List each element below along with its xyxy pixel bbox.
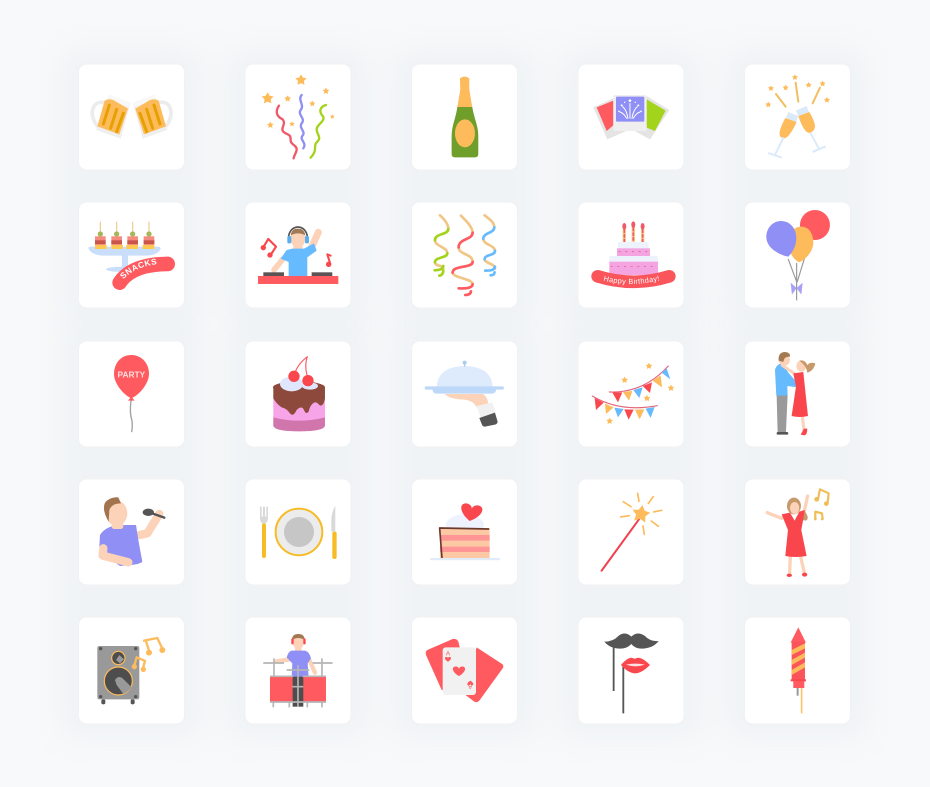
panel: dancing woman bbox=[744, 479, 850, 585]
icon: man playing drums bbox=[263, 634, 333, 707]
panel: champagne bottle bbox=[412, 64, 518, 170]
panel: balloons bbox=[744, 202, 850, 308]
panel: playing cards bbox=[412, 617, 518, 724]
panel: serving tray bbox=[412, 341, 518, 447]
panel: sparkler bbox=[578, 479, 684, 585]
icon: photos with fireworks bbox=[593, 95, 669, 139]
label: ace bottom: A bbox=[468, 683, 473, 690]
icon: slice of cake with heart bbox=[430, 503, 500, 560]
icon: stars and serpentine bbox=[262, 74, 335, 158]
icon: couple bbox=[775, 352, 815, 435]
icon: man singing bbox=[99, 497, 164, 566]
panel: dancing couple bbox=[744, 341, 850, 447]
icon: bottle bbox=[452, 76, 478, 157]
panel: beer mugs bbox=[78, 64, 184, 170]
panel: fireworks photos bbox=[578, 64, 684, 170]
icon: dancer and music notes bbox=[767, 489, 829, 577]
label: snacks: SNACKS bbox=[120, 258, 156, 278]
panel: firework rocket bbox=[744, 617, 850, 724]
label: happy birthday: Happy Birthday! bbox=[604, 276, 659, 286]
panel: party balloon bbox=[78, 341, 184, 447]
panel: drummer bbox=[245, 617, 351, 724]
panel: confetti bbox=[245, 64, 351, 170]
panel: photo booth props bbox=[578, 617, 684, 724]
panel: speaker bbox=[78, 617, 184, 724]
icon: hand holding cloche bbox=[425, 361, 504, 427]
panel: cake slice bbox=[412, 479, 518, 585]
icon: ace of hearts cards bbox=[426, 639, 503, 702]
panel: streamers bbox=[412, 202, 518, 308]
panel: singer bbox=[78, 479, 184, 585]
panel: birthday cake bbox=[578, 202, 684, 308]
icon: bunting flags and stars bbox=[592, 363, 674, 424]
panel: DJ bbox=[245, 202, 351, 308]
panel: bunting bbox=[578, 341, 684, 447]
icon: clinking beer mugs bbox=[92, 95, 171, 139]
icon: DJ at decks bbox=[258, 227, 338, 284]
icon: rocket bbox=[791, 627, 806, 713]
icon: flutes and sparks bbox=[765, 74, 830, 157]
panel: cherry cake bbox=[245, 341, 351, 447]
panel: champagne toast bbox=[744, 64, 850, 170]
icon: plate, fork and knife bbox=[260, 506, 337, 559]
icon: curled streamers bbox=[435, 215, 495, 295]
label: party: PARTY bbox=[118, 370, 146, 380]
icon: loudspeaker and notes bbox=[97, 638, 165, 704]
panel: place setting bbox=[245, 479, 351, 585]
label: ace top: A bbox=[446, 650, 451, 657]
icon: moustache and lips on sticks bbox=[604, 633, 659, 713]
icon: chocolate cherry cake bbox=[273, 357, 325, 431]
icon: three balloons bbox=[766, 210, 830, 300]
icon: sparkler wand bbox=[602, 493, 662, 571]
panel: snacks bbox=[79, 202, 184, 308]
